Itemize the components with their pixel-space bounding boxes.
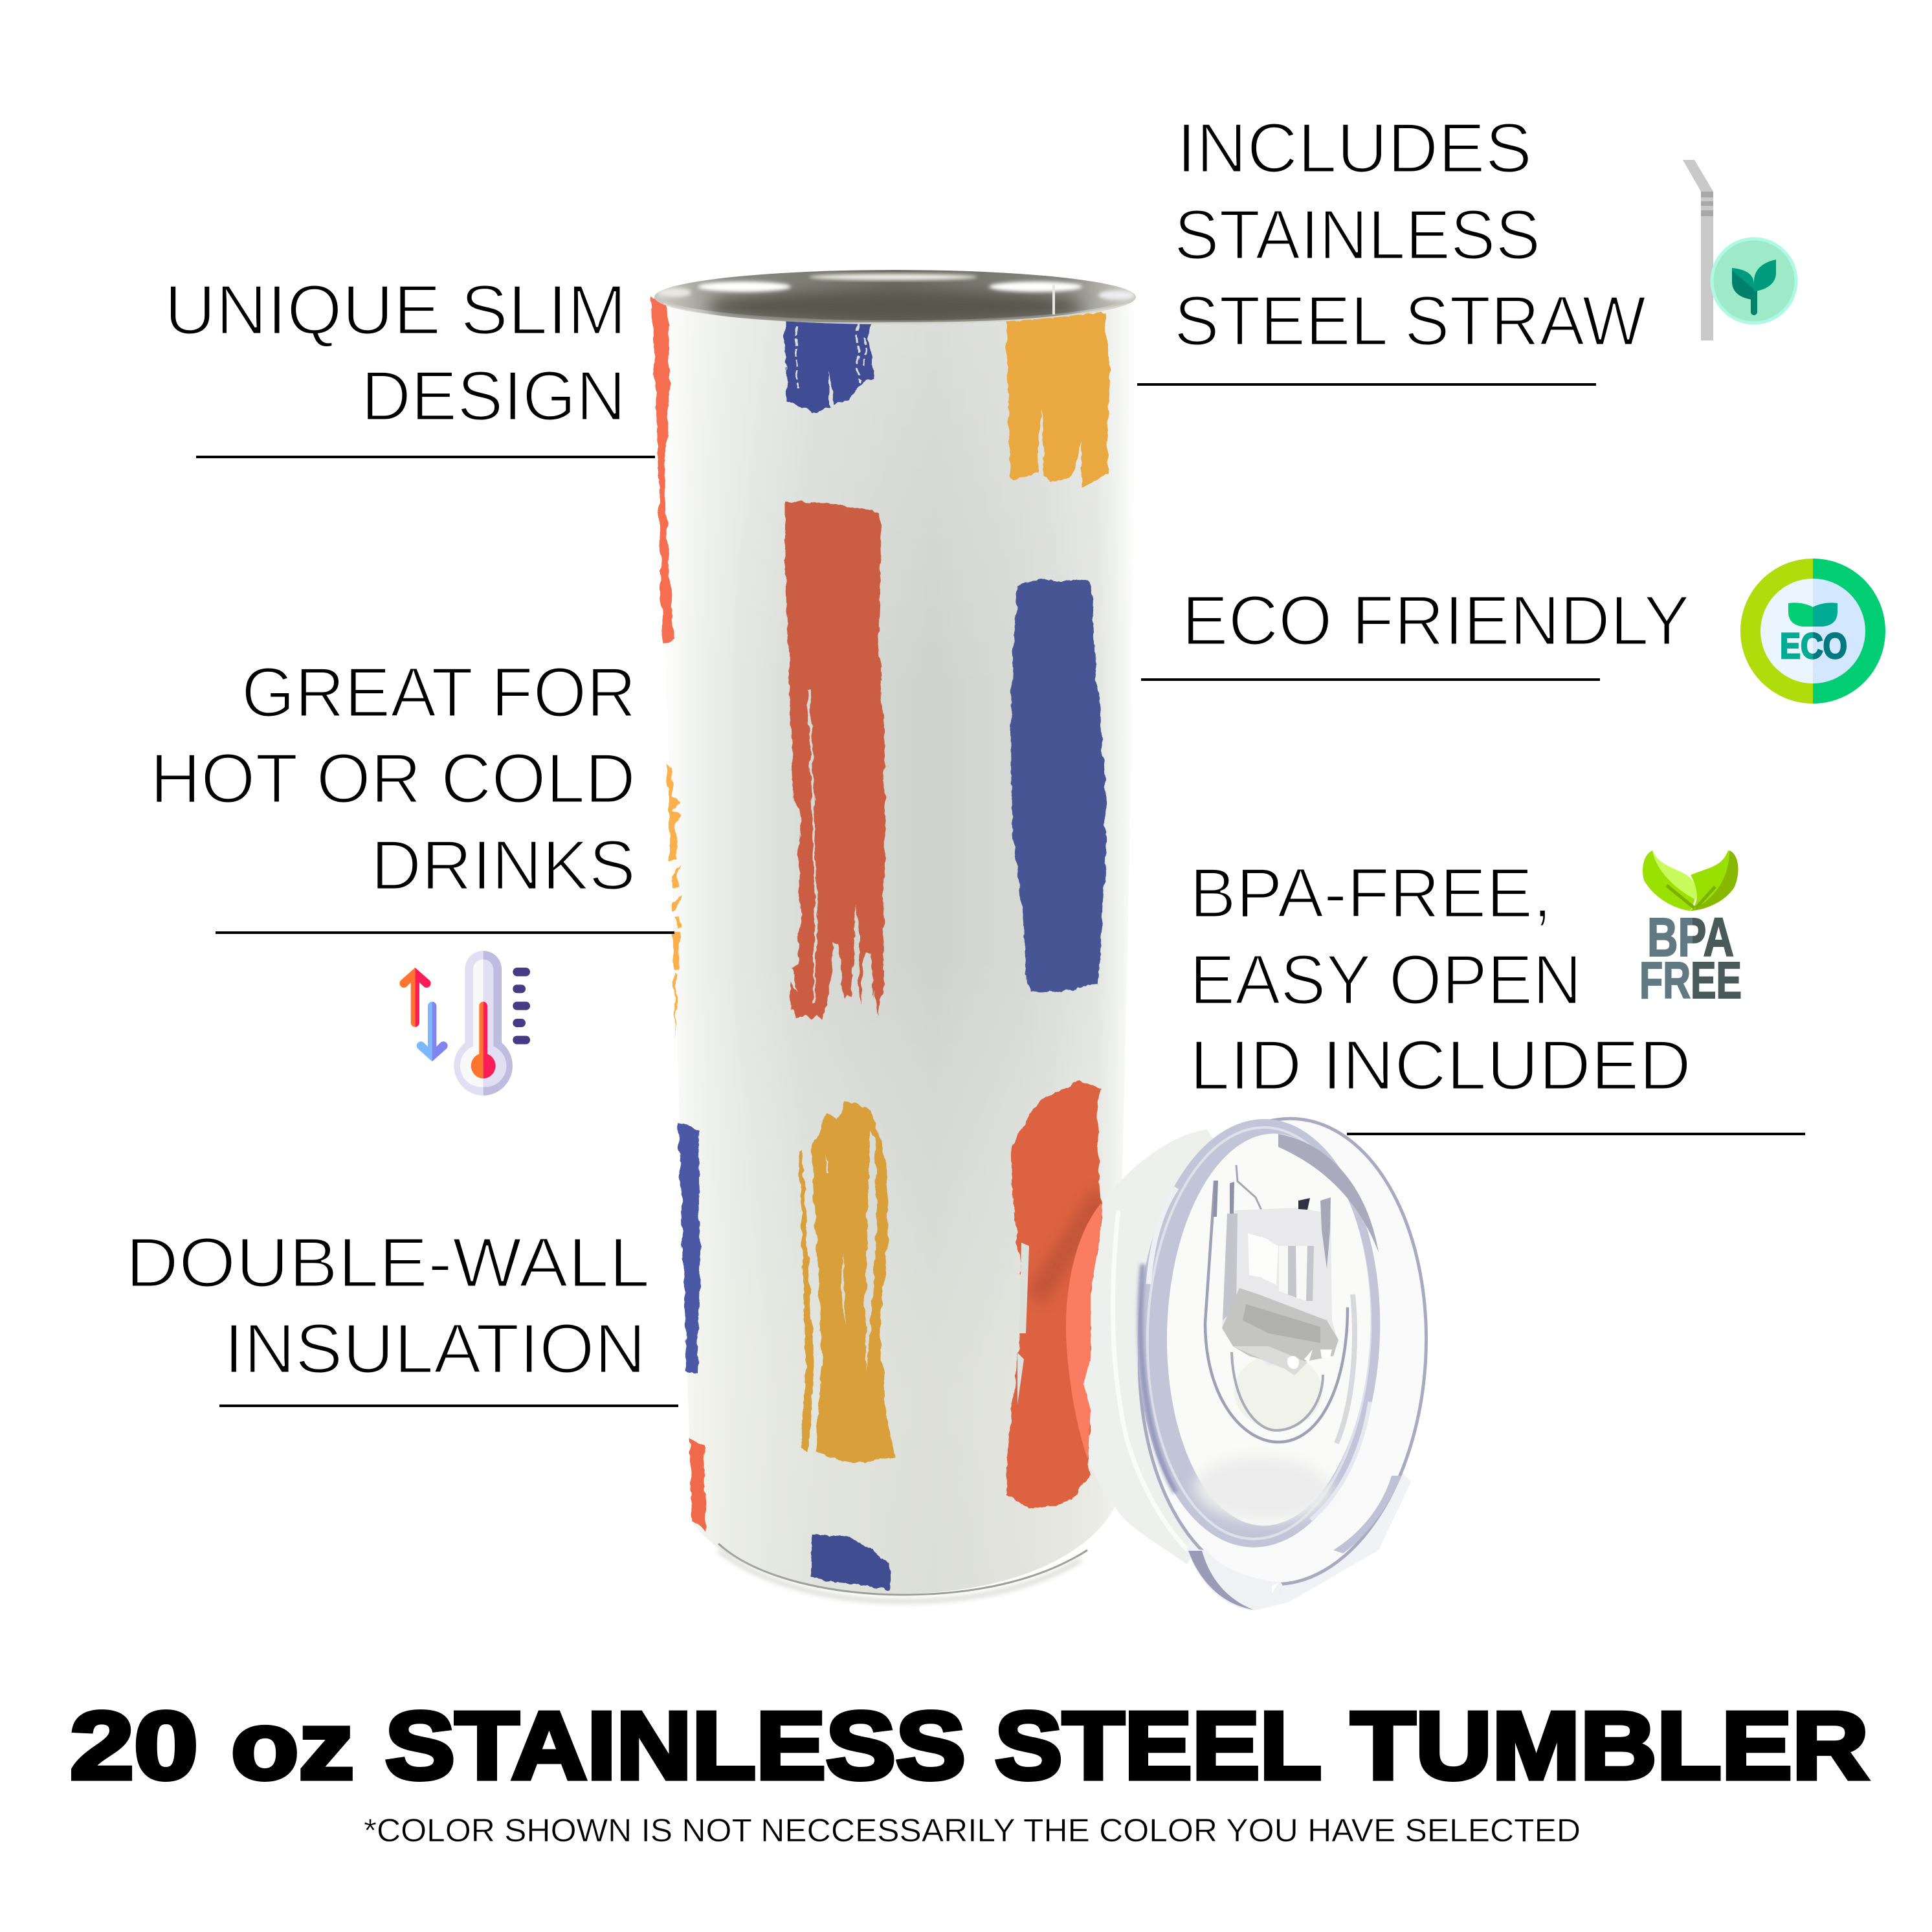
brush stroke: coral left edge [652,297,674,643]
tumbler [652,270,1136,1601]
callout: stainless steel straw: STEEL STRAW [1174,282,1646,361]
callout: hot or cold: DRINKS [371,826,636,905]
lid inner ring [1131,1115,1387,1551]
callout: unique slim design [164,271,655,458]
brush stroke: red middle [785,502,885,1020]
lid top crescent [1278,1134,1379,1252]
callout: hot or cold: GREAT FOR [241,653,636,732]
brush stroke: blue middle [1011,580,1105,992]
callout: bpa-free lid: LID INCLUDED [1190,1026,1691,1105]
brush strokes: lower area [678,1100,894,1590]
callout: double-wall insulation: INSULATION [224,1309,646,1388]
icon: thermometer [399,951,530,1096]
tumbler body [654,297,1136,1601]
brush stroke: coral left lower [689,1438,707,1531]
icon: straw with sprout [1683,160,1796,340]
lid right glare [1333,1476,1401,1553]
lid slider channel [1205,1165,1355,1443]
brush stroke: blue top [785,317,875,413]
icon: eco badge [1740,559,1885,704]
callout: hot or cold [150,653,674,934]
title: TUMBLER [1351,1693,1869,1799]
brush strokes [652,297,1110,1590]
tumbler rim [654,270,1136,324]
callout: double-wall insulation: DOUBLE-WALL [126,1223,650,1302]
callout: unique slim design: UNIQUE SLIM [164,271,627,350]
brush stroke: yellow top [1006,312,1110,488]
callout: stainless steel straw: STAINLESS [1174,195,1540,274]
lid side wall [1066,1129,1230,1564]
lid outer rim [1127,1111,1438,1610]
callout: hot or cold: HOT OR COLD [150,739,636,818]
callout: double-wall insulation [126,1223,678,1407]
icon: bpa free [1639,850,1742,1009]
lid spout tab [1187,1549,1283,1610]
title [70,1693,1869,1799]
title: STEEL [995,1693,1322,1799]
icon: eco badge: ECO [1780,625,1847,666]
lid slider mechanism [1213,1181,1338,1375]
callout: bpa-free lid: EASY OPEN [1190,940,1582,1019]
title: STAINLESS [385,1693,966,1799]
lid side wall: rim lines [1113,1210,1188,1550]
brush stroke: yellow left edge [667,765,683,1040]
title: 20 [70,1693,198,1799]
brush stroke: yellow lower [799,1100,894,1463]
icon: bpa free: FREE [1639,951,1742,1009]
callout: bpa-free lid [1190,854,1805,1135]
callout: bpa-free lid: BPA-FREE, [1190,854,1552,933]
brush stroke: blue bottom [812,1535,891,1590]
callout: stainless steel straw [1137,109,1646,386]
brush stroke: blue left lower [678,1122,700,1374]
callout: eco friendly: ECO FRIENDLY [1182,581,1690,660]
icon: bpa free: BPA [1647,907,1734,968]
brush stroke: red behind lid [1006,1081,1107,1508]
title: oz [231,1693,354,1799]
callout: unique slim design: DESIGN [361,357,626,436]
callout: stainless steel straw: INCLUDES [1177,109,1532,188]
lid [1006,1081,1438,1610]
footnote: *COLOR SHOWN IS NOT NECCESSARILY THE COLOR YOU HAVE SELECTED [364,1812,1581,1849]
